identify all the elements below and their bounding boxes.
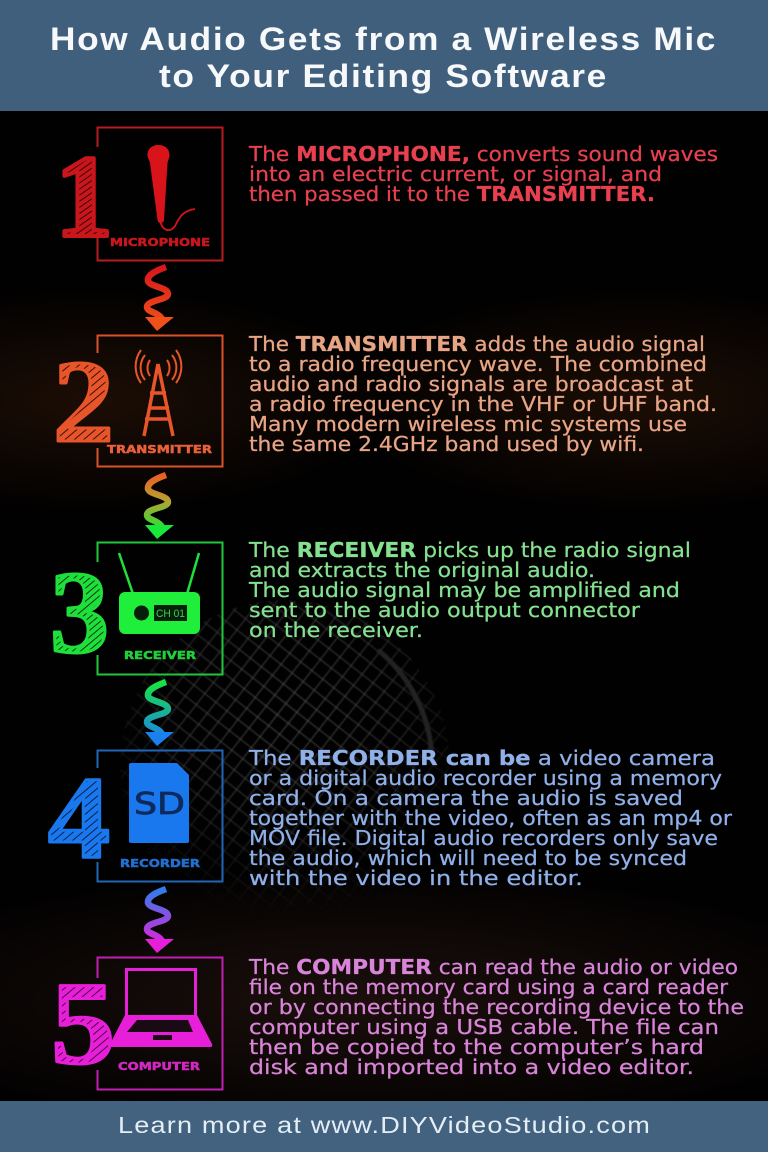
text: receiver description	[248, 538, 691, 642]
text: computer description: or by connecting the recording device to the	[249, 995, 744, 1019]
arrow: microphone to transmitter	[145, 267, 174, 331]
number 3: 3	[50, 547, 109, 678]
text: computer description: computer using a USB cable. The file can	[249, 1015, 719, 1039]
step 1: microphone panel	[55, 128, 222, 262]
text: receiver description: and extracts the original audio.	[249, 558, 595, 582]
text: transmitter description: the same 2.4GHz band used by wifi.	[249, 432, 644, 456]
number 5: 5	[51, 958, 115, 1089]
label: transmitter: TRANSMITTER	[107, 443, 213, 456]
text: recorder description: the audio, which will need to be synced	[249, 846, 687, 870]
text: computer description: The COMPUTER can read the audio or video	[248, 955, 738, 979]
text: transmitter description: Many modern wireless mic systems use	[249, 412, 687, 436]
icon: microphone	[147, 145, 195, 230]
number 1: 1	[55, 131, 113, 262]
label: receiver: RECEIVER	[124, 649, 197, 662]
arrow: transmitter to receiver	[145, 475, 174, 539]
icon: SD card	[129, 763, 189, 843]
text: transmitter description: to a radio frequency wave. The combined	[249, 352, 707, 376]
label: computer: COMPUTER	[118, 1060, 201, 1073]
text: recorder description: MOV file. Digital audio recorders only save	[249, 826, 718, 850]
text: transmitter description: a radio frequency in the VHF or UHF band.	[249, 392, 717, 416]
text: recorder description: card. On a camera the audio is saved	[249, 786, 683, 810]
label: recorder: RECORDER	[120, 857, 201, 870]
icon: radio tower	[136, 350, 181, 436]
text: microphone description: into an electric current, or signal, and	[249, 162, 662, 186]
footer text: Learn more at www.DIYVideoStudio.com	[118, 1112, 651, 1138]
icon: receiver	[119, 553, 200, 634]
text: recorder description	[248, 746, 733, 890]
icon: laptop	[110, 970, 212, 1047]
step 3: receiver panel	[50, 542, 222, 678]
number 4: 4	[48, 752, 110, 883]
text: receiver description: sent to the audio output connector	[249, 598, 641, 622]
background photo: dark microphone	[0, 316, 768, 1098]
step 5: computer panel	[51, 958, 222, 1090]
text: receiver description: on the receiver.	[249, 618, 423, 642]
text: computer description: disk and imported into a video editor.	[249, 1055, 694, 1079]
icon: receiver: CH 01	[156, 608, 185, 620]
text: recorder description: or a digital audio recorder using a memory	[249, 766, 722, 790]
text: recorder description: with the video in the editor.	[249, 866, 583, 890]
arrow: receiver to recorder	[145, 682, 174, 746]
text: microphone description: then passed it to the TRANSMITTER.	[249, 182, 655, 206]
text: receiver description: The audio signal may be amplified and	[248, 578, 680, 602]
text: computer description: then be copied to the computer’s hard	[249, 1035, 704, 1059]
step 2: transmitter panel	[53, 336, 222, 467]
text: transmitter description	[248, 332, 717, 456]
text: transmitter description: The TRANSMITTER adds the audio signal	[248, 332, 705, 356]
label: microphone: MICROPHONE	[110, 236, 210, 249]
number 2: 2	[53, 336, 114, 467]
text: microphone description: The MICROPHONE, converts sound waves	[248, 142, 718, 166]
header banner	[0, 0, 768, 111]
arrow: recorder to computer	[145, 889, 174, 953]
step 4: recorder panel	[48, 750, 222, 883]
text: computer description	[248, 955, 744, 1079]
text: recorder description: The RECORDER can be a video camera	[248, 746, 715, 770]
footer banner	[0, 1101, 768, 1152]
title: to Your Editing Software	[159, 58, 608, 94]
text: recorder description: together with the video, often as an mp4 or	[249, 806, 733, 830]
icon: SD card: SD	[134, 787, 185, 822]
text: transmitter description: audio and radio signals are broadcast at	[249, 372, 693, 396]
text: computer description: file on the memory card using a card reader	[249, 975, 729, 999]
title	[50, 21, 717, 94]
text: receiver description: The RECEIVER picks up the radio signal	[248, 538, 691, 562]
title: How Audio Gets from a Wireless Mic	[50, 21, 717, 57]
text: microphone description	[248, 142, 718, 206]
